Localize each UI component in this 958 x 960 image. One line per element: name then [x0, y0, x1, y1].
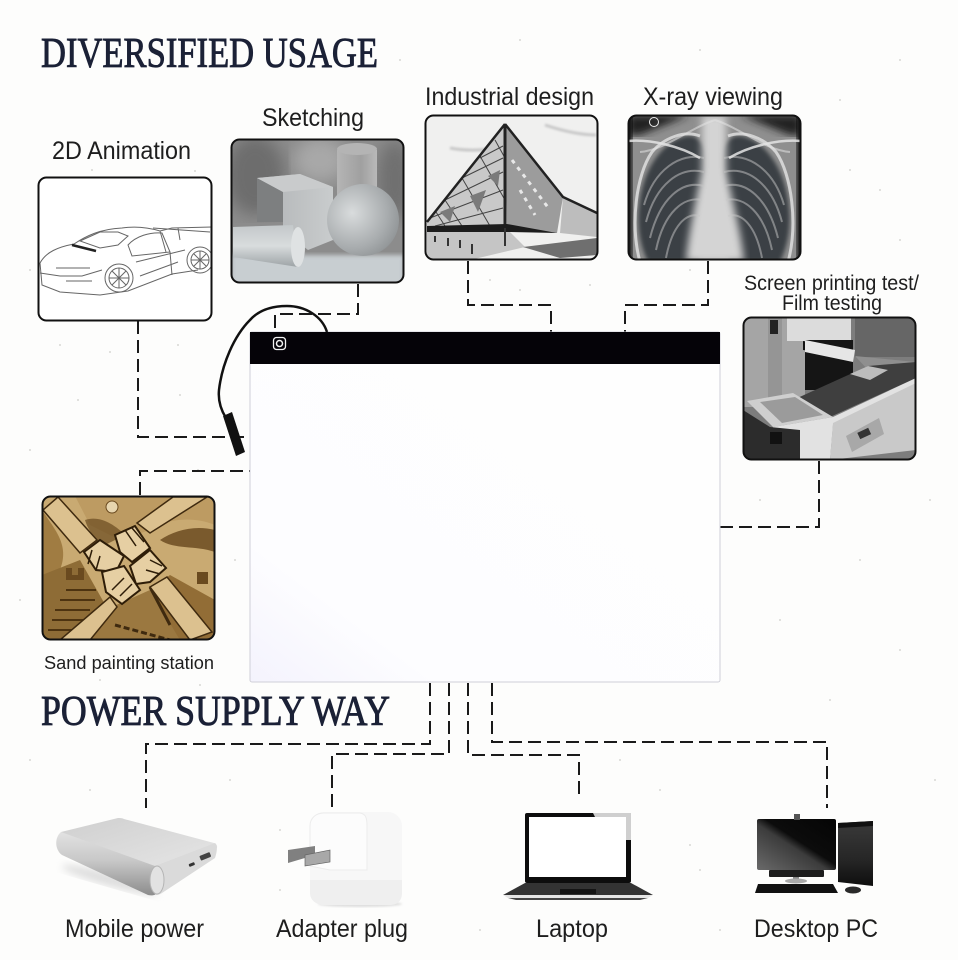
- label: Screen printing test / Film testing: Film testing: [782, 292, 882, 315]
- connector: 2D animation to tablet: [138, 321, 250, 437]
- connector: screen printing to tablet: [720, 461, 819, 527]
- connector: x-ray to tablet: [625, 261, 708, 332]
- label: Sand painting station: Sand painting station: [44, 652, 214, 673]
- label: Adapter plug: Adapter plug: [276, 915, 408, 943]
- touch switch icon: [274, 338, 286, 350]
- cable and connector: [219, 306, 327, 456]
- label: Industrial design: Industrial design: [425, 83, 594, 111]
- label: Desktop PC: Desktop PC: [754, 915, 878, 943]
- connector: mobile power: [146, 683, 430, 808]
- icon: laptop: [503, 813, 653, 900]
- panel: sketching still life: [230, 138, 404, 284]
- connector: laptop: [468, 683, 579, 796]
- icon: desktop PC: [755, 814, 873, 894]
- label: X-ray viewing: X-ray viewing: [643, 83, 783, 111]
- panel: 2D animation car sketch: [38, 177, 213, 321]
- icon: adapter plug: [288, 812, 402, 907]
- panel: chest x-ray: [622, 115, 807, 262]
- label: Mobile power: Mobile power: [65, 915, 204, 943]
- connector: sketching to tablet: [275, 284, 358, 334]
- label: Laptop: Laptop: [536, 915, 608, 943]
- connector: desktop PC: [492, 683, 827, 808]
- label: 2D Animation: 2D Animation: [52, 137, 191, 165]
- label: Screen printing test / Film testing: [744, 272, 919, 315]
- label: Sketching: Sketching: [262, 104, 364, 132]
- connector: industrial design to tablet: [468, 261, 551, 332]
- label: Screen printing test / Film testing: Screen printing test/: [744, 272, 919, 295]
- connector: adapter plug: [332, 683, 449, 808]
- panel: screen printing machine photo: [743, 317, 916, 460]
- heading: power supply way: POWER SUPPLY WAY: [41, 689, 390, 735]
- icon: mobile power bank: [56, 818, 217, 900]
- panel: industrial design sketch: [425, 115, 598, 260]
- heading: diversified usage: DIVERSIFIED USAGE: [41, 31, 378, 77]
- tablet black top bar: [250, 332, 720, 364]
- connector: sand painting to tablet: [140, 471, 250, 495]
- panel: sand painting: [42, 496, 215, 640]
- light pad tablet: [250, 332, 720, 682]
